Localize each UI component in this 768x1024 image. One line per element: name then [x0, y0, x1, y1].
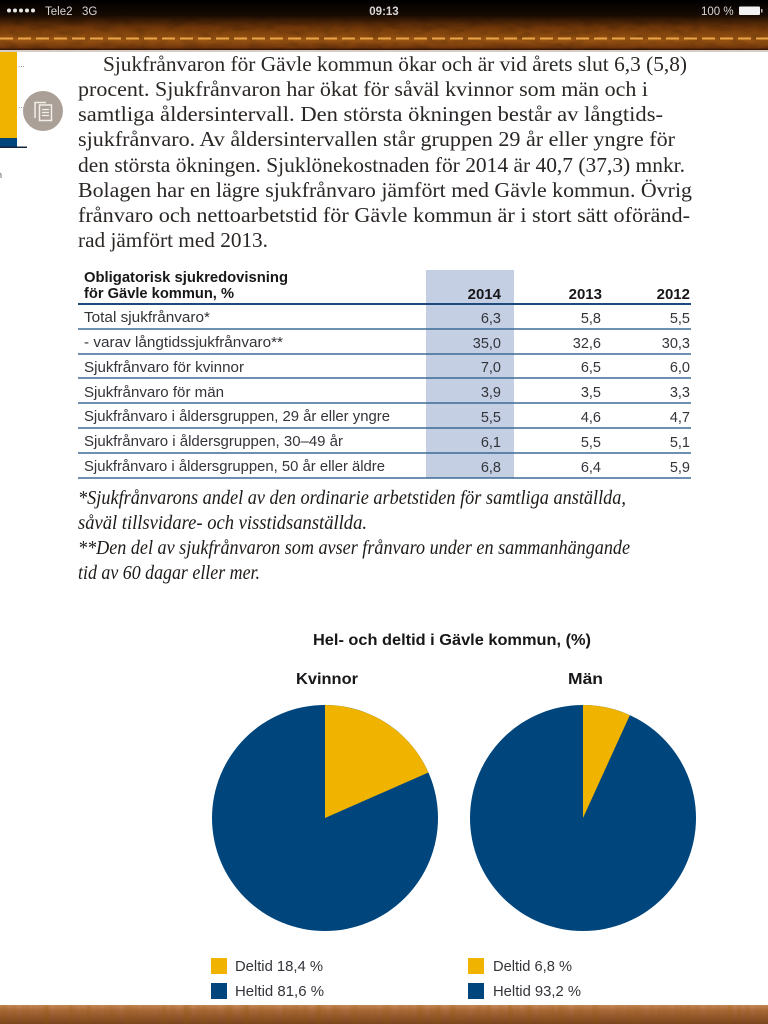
- row: långtid: [84, 335, 690, 352]
- row: långtid: 30,3: [662, 336, 690, 352]
- row: kvinnor: Sjukfrånvaro för kvinnor: [84, 360, 244, 376]
- row: 30-49 år: 5,1: [670, 435, 690, 451]
- row: 50 år: [84, 459, 690, 476]
- body paragraph: frånvaro och nettoarbetstid för Gävle kommun är i stort sätt oföränd-: [78, 203, 690, 227]
- table header: [84, 269, 690, 303]
- row: 30-49 år: Sjukfrånvaro i åldersgruppen, 30–49 år: [84, 434, 343, 450]
- body paragraph: rad jämfört med 2013.: [78, 228, 268, 252]
- row: män: [84, 385, 690, 401]
- row: kvinnor: 7,0: [481, 360, 501, 376]
- row: långtid: 35,0: [473, 336, 501, 352]
- pie chart: Män: [470, 705, 696, 931]
- status bar: [7, 6, 762, 18]
- row: män: 3,5: [581, 385, 601, 401]
- table header: för Gävle kommun, %: [84, 285, 234, 302]
- footnotes: *Sjukfrånvarons andel av den ordinarie arbetstiden för samtliga anställda,: [78, 487, 626, 509]
- clock: 09:13: [369, 6, 399, 18]
- body paragraph: Bolagen har en lägre sjukfrånvaro jämfört med Gävle kommun. Övrig: [78, 178, 693, 202]
- footnotes: [78, 487, 630, 584]
- footnotes: **Den del av sjukfrånvaron som avser frånvaro under en sammanhängande: [78, 537, 630, 559]
- row: 50 år: 5,9: [670, 460, 690, 476]
- row: 29 år: 5,5: [481, 410, 501, 426]
- legend: Män: Heltid 93,2 %: [493, 984, 581, 1000]
- side page fragment: [0, 52, 27, 180]
- side page fragment: ...: [18, 101, 25, 110]
- row: 29 år: [84, 409, 690, 426]
- row: långtid: 32,6: [573, 336, 601, 352]
- row: långtid: - varav långtidssjukfrånvaro**: [84, 335, 283, 351]
- legend: Kvinnor: Deltid 18,4 %: [235, 959, 323, 975]
- table header: Obligatorisk sjukredovisning: [84, 269, 288, 286]
- pie chart: Kvinnor: [212, 705, 438, 931]
- body paragraph: sjukfrånvaro. Av åldersintervallen står gruppen 29 år eller yngre för: [78, 127, 675, 151]
- row: 30-49 år: 5,5: [581, 435, 601, 451]
- battery percent: 100 %: [701, 6, 734, 18]
- row: kvinnor: 6,0: [670, 360, 690, 376]
- row: total: 5,8: [581, 311, 601, 327]
- row: män: Sjukfrånvaro för män: [84, 385, 224, 401]
- row: 29 år: Sjukfrånvaro i åldersgruppen, 29 år eller yngre: [84, 409, 390, 425]
- leather header bar: [0, 0, 768, 52]
- row: 50 år: Sjukfrånvaro i åldersgruppen, 50 år eller äldre: [84, 459, 385, 475]
- row: 50 år: 6,8: [481, 460, 501, 476]
- side page fragment: ...: [18, 60, 25, 69]
- row: kvinnor: [84, 360, 690, 376]
- footnotes: såväl tillsvidare- och visstidsanställda.: [78, 512, 367, 534]
- legend: Kvinnor: [211, 958, 324, 1000]
- row: 29 år: 4,6: [581, 410, 601, 426]
- table header: 2014: [468, 286, 502, 303]
- row: total: 5,5: [670, 311, 690, 327]
- row: kvinnor: 6,5: [581, 360, 601, 376]
- legend: Män: [468, 958, 581, 1000]
- body paragraph: procent. Sjukfrånvaron har ökat för såväl kvinnor som män och i: [78, 77, 648, 101]
- body paragraph: den största ökningen. Sjuklönekostnaden för 2014 är 40,7 (37,3) mnkr.: [78, 153, 685, 177]
- battery icon: [739, 6, 762, 15]
- network: 3G: [82, 6, 97, 18]
- table header: 2012: [657, 286, 690, 303]
- footnotes: tid av 60 dagar eller mer.: [78, 562, 260, 584]
- table: obligatorisk sjukredovisning: [78, 269, 691, 478]
- body paragraph: Sjukfrånvaron för Gävle kommun ökar och är vid årets slut 6,3 (5,8): [103, 52, 687, 76]
- row: 29 år: 4,7: [670, 410, 690, 426]
- table header: 2013: [569, 286, 602, 303]
- row: 50 år: 6,4: [581, 460, 601, 476]
- heading: Kvinnor: Kvinnor: [296, 671, 358, 688]
- legend: Män: Deltid 6,8 %: [493, 959, 572, 975]
- chart title: Hel- och deltid i Gävle kommun, (%): [313, 632, 591, 649]
- signal dots: [7, 8, 35, 12]
- highlighted 2014 column: [426, 270, 514, 478]
- row: män: 3,9: [481, 385, 501, 401]
- row: total: 6,3: [481, 311, 501, 327]
- row: 30-49 år: 6,1: [481, 435, 501, 451]
- row: 30-49 år: [84, 434, 690, 451]
- body paragraph: [78, 52, 693, 252]
- body paragraph: samtliga åldersintervall. Den största ökningen består av långtids-: [78, 102, 663, 126]
- heading: Män: Män: [568, 671, 603, 688]
- legend: Kvinnor: Heltid 81,6 %: [235, 984, 324, 1000]
- row: total: [84, 310, 690, 327]
- row: total: Total sjukfrånvaro*: [84, 310, 210, 326]
- row: män: 3,3: [670, 385, 690, 401]
- wood footer bar: [0, 1005, 768, 1024]
- copy pages button icon: [23, 91, 63, 131]
- carrier: Tele2: [45, 6, 72, 18]
